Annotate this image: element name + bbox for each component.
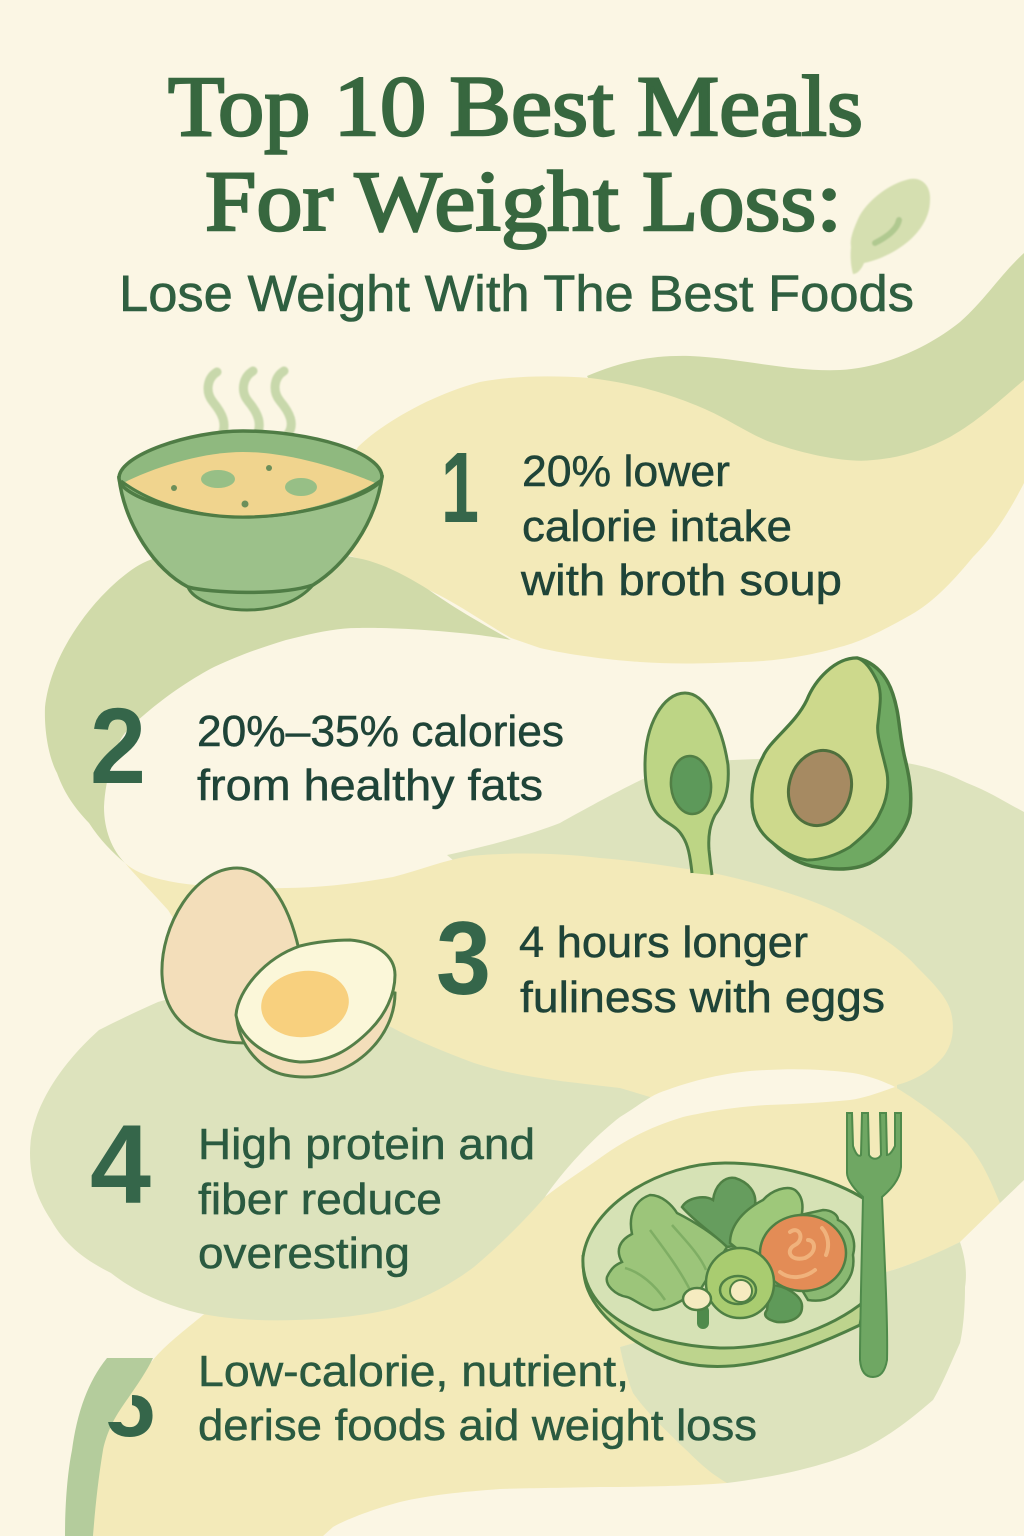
item 2: 2 (90, 685, 146, 806)
item 2 (90, 685, 564, 810)
icon: avocado spoon half (645, 693, 728, 875)
icon: steam (208, 371, 291, 437)
title: Top 10 Best Meals (168, 58, 863, 154)
item 1 (441, 432, 842, 605)
icon: leaf (851, 179, 930, 274)
title (168, 58, 863, 249)
icon: salad plate and fork (583, 1113, 901, 1377)
item 1: calorie intake (522, 502, 792, 551)
item 5: derise foods aid weight loss (198, 1401, 757, 1450)
item 4: High protein and (198, 1120, 535, 1169)
item 2: 20%–35% calories (197, 707, 564, 756)
item 3: 3 (436, 901, 491, 1017)
item 1: with broth soup (520, 556, 842, 605)
icon: lettuce (607, 1178, 854, 1322)
item 1: 20% lower (522, 447, 730, 496)
item 3 (436, 901, 885, 1022)
icon: fork (847, 1113, 901, 1377)
icon: cucumber slice (706, 1248, 774, 1318)
icon: halved egg (236, 940, 395, 1077)
item 3: fuliness with eggs (520, 973, 885, 1022)
icon: tomato (760, 1215, 846, 1291)
title: For Weight Loss: (205, 153, 842, 249)
item 5: Low-calorie, nutrient, (198, 1347, 629, 1396)
icon: whole egg (162, 868, 299, 1043)
item 4: 4 (90, 1102, 151, 1227)
subtitle: Lose Weight With The Best Foods (119, 265, 914, 322)
icon: soup bowl (119, 371, 382, 610)
item 5: 5 (105, 1356, 155, 1456)
item 4: overesting (198, 1229, 410, 1278)
item 1: 1 (441, 432, 479, 544)
item 4 (90, 1102, 535, 1278)
item 5 (108, 1354, 756, 1450)
icon: avocado (645, 658, 911, 875)
item 2: from healthy fats (197, 761, 543, 810)
item 4: fiber reduce (198, 1175, 442, 1224)
item 3: 4 hours longer (519, 918, 808, 967)
icon: eggs (162, 868, 395, 1077)
